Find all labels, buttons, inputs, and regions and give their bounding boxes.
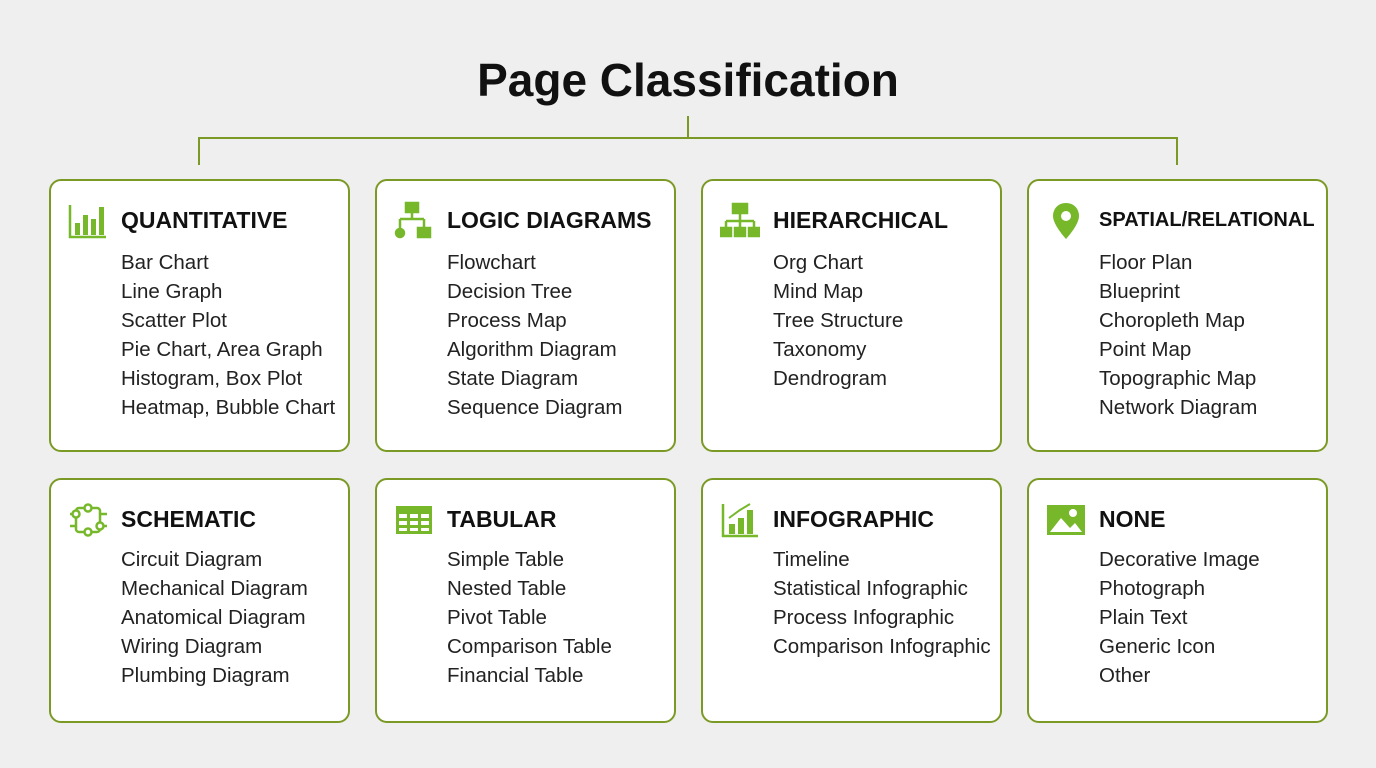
heading: SCHEMATIC xyxy=(121,506,256,532)
icon: map pin xyxy=(1053,203,1079,239)
heading: HIERARCHICAL xyxy=(773,207,948,233)
list: Dendrogram xyxy=(773,367,887,390)
list: Network Diagram xyxy=(1099,396,1257,419)
list: Other xyxy=(1099,664,1150,687)
list: Algorithm Diagram xyxy=(447,338,617,361)
panel: quantitative xyxy=(49,179,350,452)
list: Mind Map xyxy=(773,280,863,303)
icon: bar chart xyxy=(68,205,106,238)
title: Page Classification xyxy=(477,54,899,106)
panel: logic diagrams xyxy=(375,179,676,452)
list: Bar Chart xyxy=(121,251,209,274)
list: Simple Table xyxy=(447,548,564,571)
heading: INFOGRAPHIC xyxy=(773,506,934,532)
list: Topographic Map xyxy=(1099,367,1256,390)
list: Floor Plan xyxy=(1099,251,1192,274)
heading: SPATIAL/RELATIONAL xyxy=(1099,209,1315,231)
list: Pie Chart, Area Graph xyxy=(121,338,323,361)
list: Plain Text xyxy=(1099,606,1188,629)
heading: QUANTITATIVE xyxy=(121,207,288,233)
list: Comparison Infographic xyxy=(773,635,991,658)
panel: hierarchical xyxy=(701,179,1002,452)
list: Decorative Image xyxy=(1099,548,1260,571)
icon: flowchart xyxy=(394,202,432,238)
list: Histogram, Box Plot xyxy=(121,367,302,390)
list: Pivot Table xyxy=(447,606,547,629)
list xyxy=(121,548,308,687)
heading: NONE xyxy=(1099,506,1165,532)
list xyxy=(447,548,612,687)
list: State Diagram xyxy=(447,367,578,390)
heading: TABULAR xyxy=(447,506,556,532)
list: Line Graph xyxy=(121,280,222,303)
list xyxy=(1099,548,1260,687)
list: Choropleth Map xyxy=(1099,309,1245,332)
list: Financial Table xyxy=(447,664,583,687)
icon: image xyxy=(1047,505,1085,535)
list: Mechanical Diagram xyxy=(121,577,308,600)
list: Taxonomy xyxy=(773,338,866,361)
icon: org chart xyxy=(720,202,760,238)
list xyxy=(773,548,991,658)
list: Point Map xyxy=(1099,338,1191,361)
list: Wiring Diagram xyxy=(121,635,262,658)
icon: table xyxy=(396,506,432,534)
list: Statistical Infographic xyxy=(773,577,968,600)
panel: none xyxy=(1027,478,1328,723)
heading: LOGIC DIAGRAMS xyxy=(447,207,651,233)
panel: tabular xyxy=(375,478,676,723)
list: Blueprint xyxy=(1099,280,1180,303)
list: Org Chart xyxy=(773,251,863,274)
list xyxy=(447,251,622,419)
icon: circuit xyxy=(70,503,107,537)
list: Anatomical Diagram xyxy=(121,606,306,629)
list: Tree Structure xyxy=(773,309,903,332)
list: Circuit Diagram xyxy=(121,548,262,571)
list: Plumbing Diagram xyxy=(121,664,290,687)
list: Process Infographic xyxy=(773,606,954,629)
list: Process Map xyxy=(447,309,567,332)
list xyxy=(1099,251,1257,419)
panel: schematic xyxy=(49,478,350,723)
list: Comparison Table xyxy=(447,635,612,658)
connector xyxy=(198,116,1178,165)
list: Sequence Diagram xyxy=(447,396,622,419)
icon: infographic chart xyxy=(722,503,758,538)
list: Timeline xyxy=(773,548,850,571)
list: Generic Icon xyxy=(1099,635,1215,658)
list: Heatmap, Bubble Chart xyxy=(121,396,335,419)
list: Scatter Plot xyxy=(121,309,227,332)
panel: spatial/relational xyxy=(1027,179,1328,452)
list: Decision Tree xyxy=(447,280,572,303)
list xyxy=(773,251,903,390)
list: Photograph xyxy=(1099,577,1205,600)
list xyxy=(121,251,336,419)
panel: infographic xyxy=(701,478,1002,723)
list: Flowchart xyxy=(447,251,536,274)
list: Nested Table xyxy=(447,577,566,600)
